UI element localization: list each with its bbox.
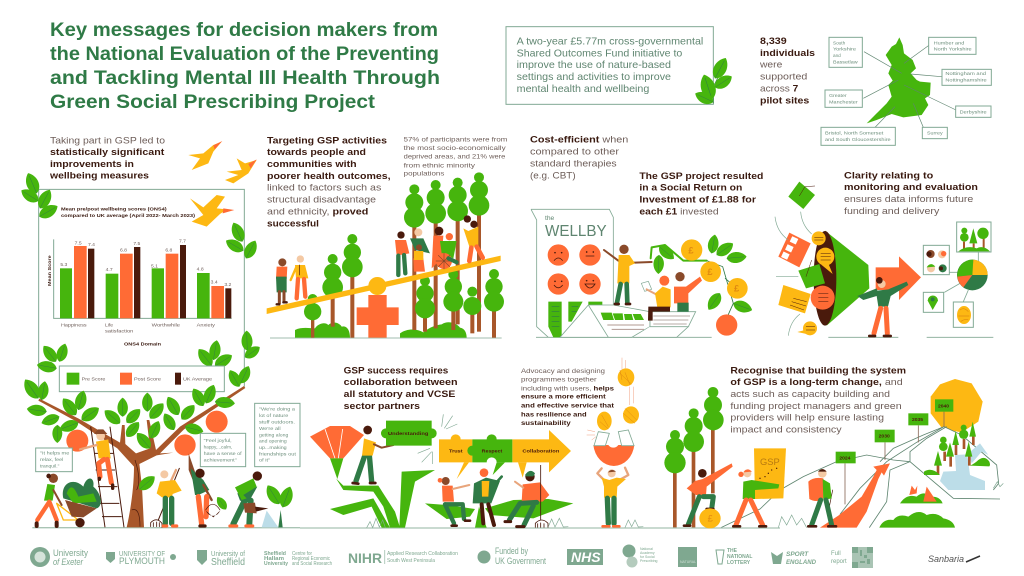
chart title: Mean pre/post wellbeing scores (ONS4) bbox=[61, 207, 167, 213]
logo: Sheffield Hallam University CRESR: University bbox=[264, 561, 288, 567]
logo: National Academy for Social Prescribing: for Social bbox=[640, 555, 655, 559]
map of England with pilot sites: Yorkshire bbox=[833, 47, 856, 52]
logo: The National Lottery bbox=[716, 548, 752, 566]
advocacy text: programmes together bbox=[521, 377, 598, 384]
heading: improvements in bbox=[50, 159, 134, 169]
trees box bbox=[957, 222, 991, 252]
social return text: in a Social Return on bbox=[639, 183, 743, 193]
tall trees bbox=[664, 387, 724, 528]
grass bbox=[367, 518, 643, 528]
advocacy text: has resilience and bbox=[521, 411, 587, 418]
panel: monitoring and evaluation bbox=[775, 170, 993, 337]
advocacy text: sustainability bbox=[521, 420, 571, 427]
logo: The National Lottery: LOTTERY bbox=[727, 560, 751, 566]
grass bbox=[778, 482, 1003, 528]
bar chart: Worthwhile bbox=[152, 323, 180, 329]
bar chart: 4.7 bbox=[106, 267, 113, 273]
puzzle arrow bbox=[439, 430, 571, 479]
person with arms out bbox=[857, 277, 908, 336]
waterfall bbox=[940, 443, 988, 490]
puzzle: understanding bbox=[381, 421, 437, 446]
quote: nature: "We're doing a bbox=[259, 407, 295, 413]
individuals supported text: individuals bbox=[760, 48, 815, 58]
logo: Funded by UK Government: Funded by bbox=[495, 546, 528, 556]
map of England with pilot sites: Nottingham and bbox=[945, 71, 987, 76]
quote: joyful: have a sense of bbox=[204, 451, 242, 457]
full report QR bbox=[831, 547, 873, 568]
person watering plant bbox=[230, 471, 296, 527]
bar chart: 5.3 bbox=[60, 262, 67, 268]
map of England with pilot sites: Surrey bbox=[927, 130, 943, 135]
quote: nature: friendships out bbox=[259, 451, 297, 457]
logo: University of Plymouth: PLYMOUTH bbox=[119, 556, 165, 567]
title: Key messages for decision makers from bbox=[50, 19, 438, 41]
puzzle arrow: Trust bbox=[449, 448, 463, 454]
tree foliage bbox=[20, 364, 253, 494]
title bbox=[50, 19, 440, 113]
hiker bbox=[808, 469, 836, 526]
small trees and bushes bbox=[924, 422, 990, 475]
heading text: towards people and bbox=[267, 147, 366, 157]
quote: joyful: happy,...calm, bbox=[204, 445, 232, 451]
heading text: communities with bbox=[267, 159, 357, 169]
logo: Funded by UK Government bbox=[478, 546, 546, 566]
chart legend bbox=[59, 366, 224, 392]
collaboration heading: collaboration between bbox=[344, 377, 458, 387]
sun bbox=[931, 379, 983, 432]
heading text: poorer health outcomes, bbox=[267, 171, 391, 181]
heading text: and ethnicity, proved bbox=[267, 206, 369, 216]
year signposts: 2024 bbox=[839, 455, 851, 461]
people on see-saw bbox=[276, 215, 483, 304]
bar chart: 3.4 bbox=[211, 280, 218, 286]
falling coins bbox=[587, 358, 639, 440]
map of England with pilot sites: Bassetlaw bbox=[833, 59, 858, 64]
logo: National Academy for Social Prescribing: Prescribing bbox=[640, 559, 658, 563]
cost-efficient text: Cost-efficient when bbox=[530, 135, 628, 145]
data diagram bbox=[923, 222, 991, 327]
cost-efficient text: compared to other bbox=[530, 147, 619, 157]
quote: joyful: achievement" bbox=[204, 458, 237, 464]
title: and Tackling Mental Ill Health Through bbox=[50, 67, 440, 89]
individuals supported text: across 7 bbox=[760, 84, 798, 94]
panel: collaboration and advocacy bbox=[300, 358, 660, 528]
summary box: improve the use of nature-based bbox=[517, 60, 671, 71]
puzzle arrow: Respect bbox=[482, 448, 503, 454]
footer logos bbox=[30, 544, 980, 568]
bar chart: 5.1 bbox=[151, 263, 158, 269]
logo: Sport England: SPORT bbox=[786, 551, 809, 558]
leaves around chart bbox=[18, 171, 263, 374]
full report QR: report bbox=[831, 559, 847, 565]
logo: University of Exeter: University bbox=[53, 548, 88, 559]
statistics text: from ethnic minority bbox=[404, 162, 476, 169]
map of England with pilot sites: Nottinghamshire bbox=[945, 77, 987, 82]
smiley faces bbox=[548, 244, 601, 295]
logo: University of Exeter: of Exeter bbox=[53, 557, 84, 568]
logo: National Academy for Social Prescribing: Academy bbox=[640, 551, 655, 555]
bar chart: 6.8 bbox=[120, 247, 127, 253]
summary box: settings and activities to improve bbox=[517, 72, 671, 83]
chart title: compared to UK average (April 2022- March 2023) bbox=[61, 213, 195, 219]
tree bbox=[20, 364, 253, 527]
logo: Funded by UK Government: UK Government bbox=[495, 556, 546, 566]
social return text bbox=[639, 171, 764, 217]
logo: University of Sheffield: Sheffield bbox=[211, 557, 245, 568]
logo: Natural England: NATURAL bbox=[680, 560, 696, 564]
apples bbox=[66, 411, 228, 456]
advocacy text: Advocacy and designing bbox=[521, 368, 605, 375]
bar chart: 7.5 bbox=[133, 241, 140, 247]
logo: NIHR: NIHR bbox=[348, 550, 382, 566]
heading: Clarity relating to bbox=[844, 170, 934, 180]
heading: of GSP is a long-term change, and bbox=[730, 377, 903, 387]
person with map bbox=[733, 448, 786, 526]
coins and apple bbox=[681, 239, 748, 336]
title: Green Social Prescribing Project bbox=[50, 91, 376, 113]
map of England with pilot sites: Bristol, North Somerset bbox=[825, 130, 884, 135]
ground line bbox=[300, 526, 660, 530]
bar chart: Happiness bbox=[61, 323, 87, 329]
WELLBY document: WELLBY bbox=[545, 223, 607, 240]
year signposts: 2030 bbox=[879, 434, 890, 440]
heading: impact and consistency bbox=[730, 425, 842, 435]
statistics text: deprived areas, and 21% were bbox=[404, 154, 506, 161]
bar chart: 3.2 bbox=[224, 282, 231, 288]
map of England with pilot sites: South bbox=[833, 40, 846, 45]
seated people bbox=[438, 465, 549, 528]
chart title bbox=[61, 207, 195, 219]
social return text: Investment of £1.88 for bbox=[639, 195, 756, 205]
chart frame bbox=[39, 189, 244, 393]
quote: relax: relax, feel bbox=[40, 457, 63, 463]
puzzle arrow: Collaboration bbox=[522, 448, 559, 454]
individuals supported text: were bbox=[759, 60, 782, 70]
person with rake bbox=[151, 468, 182, 527]
floating documents bbox=[775, 182, 825, 336]
quote: relax: tranquil." bbox=[40, 463, 60, 469]
person on ladder bbox=[80, 427, 124, 527]
bar chart: Anxiety bbox=[197, 323, 216, 329]
logo: Sheffield Hallam University CRESR: Centre for bbox=[292, 551, 312, 557]
logo: National Academy for Social Prescribing: National bbox=[640, 547, 653, 551]
advocacy text: and effective service that bbox=[521, 403, 615, 410]
collaboration heading: sector partners bbox=[344, 401, 420, 411]
year signposts: 2035 bbox=[912, 417, 923, 423]
panel: project summary and pilot sites bbox=[506, 27, 991, 145]
quote: nature: of it" bbox=[259, 458, 270, 464]
advocacy text: including with users, helps bbox=[521, 385, 614, 392]
logo: The National Lottery: NATIONAL bbox=[727, 554, 752, 560]
see-saw with cross bbox=[267, 256, 501, 338]
individuals supported text bbox=[759, 36, 815, 106]
bar chart: Mean Score bbox=[47, 255, 53, 286]
cost-efficient text bbox=[530, 135, 628, 181]
signature bbox=[928, 554, 980, 564]
orange path arrow bbox=[820, 463, 890, 528]
arrow bbox=[876, 256, 921, 300]
advocacy text: ensure a more efficient bbox=[521, 394, 607, 401]
quote: relax: "It helps me bbox=[40, 450, 70, 456]
statistics text: the most socio-economically bbox=[404, 145, 506, 152]
social return text: The GSP project resulted bbox=[639, 171, 764, 181]
bar chart: 7.5 bbox=[75, 240, 82, 246]
heading: wellbeing measures bbox=[49, 171, 149, 181]
bar chart: Life bbox=[105, 323, 113, 329]
individuals supported text: pilot sites bbox=[760, 96, 809, 106]
heading: funding project managers and green bbox=[730, 401, 902, 411]
logo: Natural England bbox=[678, 547, 697, 567]
people box bbox=[923, 245, 949, 275]
year signposts bbox=[836, 399, 953, 504]
logo: University of Exeter bbox=[30, 547, 88, 568]
person with wheelbarrow bbox=[37, 474, 101, 527]
heading: providers will help ensure lasting bbox=[730, 413, 884, 423]
quote: joyful bbox=[200, 433, 246, 467]
heading text: structural disadvantage bbox=[267, 195, 376, 205]
bar chart: ONS4 Domain bbox=[124, 341, 161, 347]
summary box: A two-year £5.77m cross-governmental bbox=[517, 37, 703, 48]
map of England with pilot sites: Greater bbox=[829, 93, 847, 98]
quote: nature: stuff outdoors. bbox=[259, 420, 295, 426]
person presenting bbox=[604, 245, 652, 304]
social return text: each £1 invested bbox=[639, 207, 719, 217]
heading: statistically significant bbox=[50, 147, 164, 157]
trees bbox=[304, 172, 504, 338]
quote: nature: and opening bbox=[259, 439, 287, 445]
quote: relax bbox=[36, 448, 72, 472]
summary box: Shared Outcomes Fund initiative to bbox=[517, 48, 683, 59]
heading text bbox=[267, 135, 391, 228]
summary box bbox=[506, 27, 735, 107]
quote: nature bbox=[255, 403, 300, 467]
map of England with pilot sites: and bbox=[833, 53, 841, 58]
statistics text: populations bbox=[404, 171, 445, 178]
statistics text: 57% of participants were from bbox=[404, 136, 508, 143]
icon: birds bbox=[188, 141, 257, 227]
heading: Recognise that building the system bbox=[730, 365, 906, 375]
pie chart bbox=[957, 260, 988, 290]
cost-efficient text: standard therapies bbox=[530, 159, 617, 169]
heading: Taking part in GSP led to bbox=[50, 135, 165, 145]
chart legend: UK Average bbox=[183, 376, 212, 382]
heading bbox=[49, 135, 165, 181]
advocacy text bbox=[521, 368, 615, 427]
logo: The National Lottery: THE bbox=[727, 548, 738, 554]
bar chart: 7.4 bbox=[88, 242, 95, 248]
logo: University of Plymouth bbox=[106, 551, 176, 567]
person pointing on coin bbox=[684, 463, 733, 528]
collaboration heading: GSP success requires bbox=[344, 365, 448, 375]
title: the National Evaluation of the Preventing bbox=[50, 43, 439, 65]
puzzle: understanding: Understanding bbox=[388, 431, 428, 437]
quote: nature: lot of nature bbox=[259, 413, 289, 419]
ground bbox=[828, 336, 993, 339]
coins and apple: £ bbox=[734, 284, 740, 294]
collaboration heading: all statutory and VCSE bbox=[344, 389, 455, 399]
logo: Sheffield Hallam University CRESR: and Social Research bbox=[292, 561, 332, 567]
seating leaves bbox=[425, 499, 573, 528]
map of England with pilot sites: Manchester bbox=[829, 100, 858, 105]
map of England with pilot sites: Humber and bbox=[934, 40, 965, 45]
ground line bbox=[32, 526, 300, 530]
person picking apple bbox=[189, 453, 229, 526]
foreground bush bbox=[879, 512, 955, 528]
logo: University of Plymouth: UNIVERSITY OF bbox=[119, 551, 165, 558]
ground and bushes bbox=[270, 322, 502, 338]
logo: Sheffield Hallam University CRESR: Regional Economic bbox=[292, 556, 330, 562]
heading text: Targeting GSP activities bbox=[267, 135, 387, 145]
bar chart bbox=[47, 238, 232, 347]
logo: University of Sheffield: University of bbox=[211, 549, 246, 558]
collaboration heading bbox=[344, 365, 458, 411]
brain box bbox=[953, 302, 973, 327]
seated people bbox=[641, 272, 702, 321]
bar chart: satisfaction bbox=[105, 329, 134, 335]
bar chart: 6.8 bbox=[165, 247, 172, 253]
person holding puzzle piece bbox=[353, 426, 393, 484]
panel: wellbeing improvements chart bbox=[18, 135, 263, 393]
bar chart: 7.7 bbox=[179, 238, 186, 244]
logo: National Academy for Social Prescribing bbox=[622, 544, 658, 568]
bar chart: 4.8 bbox=[197, 266, 204, 272]
panel: targeting GSP see-saw bbox=[267, 135, 508, 338]
signature: Sanbaria bbox=[928, 554, 964, 564]
WELLBY document bbox=[531, 209, 712, 337]
logo: Sport England bbox=[771, 551, 816, 566]
person pointing on coin: £ bbox=[708, 514, 714, 524]
WELLBY document: the bbox=[545, 215, 555, 222]
logo: Sheffield Hallam University CRESR bbox=[264, 551, 332, 567]
full report QR: Full bbox=[831, 551, 841, 557]
ground line bbox=[660, 526, 780, 530]
quote: nature: up...making bbox=[259, 445, 287, 451]
map of England with pilot sites: North Yorkshire bbox=[934, 47, 972, 52]
money tree branch bbox=[651, 234, 754, 336]
logo: Sport England: ENGLAND bbox=[786, 559, 816, 566]
panel: apple tree and quotes bbox=[20, 364, 300, 528]
logo: NIHR bbox=[348, 550, 458, 566]
heading bbox=[844, 170, 978, 216]
map of England with pilot sites bbox=[821, 37, 991, 145]
mountains bbox=[721, 427, 1000, 528]
chart legend: Pre Score bbox=[82, 376, 106, 382]
location pin box bbox=[923, 292, 944, 312]
statistics text bbox=[404, 136, 508, 178]
logo: NIHR: South West Peninsula bbox=[387, 558, 436, 564]
rabbits and bush bbox=[900, 486, 943, 503]
speech bubbles bbox=[797, 231, 835, 335]
flower plant bbox=[310, 426, 435, 528]
quote: nature: getting along bbox=[259, 432, 289, 438]
summary box: mental health and wellbeing bbox=[517, 84, 650, 95]
megaphone bbox=[775, 182, 869, 336]
panel: long-term change bbox=[660, 365, 1003, 528]
map of England with pilot sites: and South Gloucestershire bbox=[825, 137, 891, 142]
coins and apple: £ bbox=[688, 245, 694, 255]
chart legend: Post Score bbox=[134, 376, 161, 382]
logo: University of Sheffield bbox=[197, 549, 246, 568]
magnet and person bbox=[593, 430, 634, 526]
quote: joyful: "Feel joyful, bbox=[204, 438, 232, 444]
logo: NIHR: Applied Research Collaboration bbox=[387, 551, 458, 557]
year signposts: 2040 bbox=[938, 403, 949, 409]
heading bbox=[730, 365, 906, 435]
individuals supported text: 8,339 bbox=[760, 36, 787, 46]
coins and apple: £ bbox=[707, 267, 713, 277]
panel: cost-efficient and social return bbox=[530, 135, 764, 337]
heading: acts such as capacity building and bbox=[730, 389, 890, 399]
quote: nature: We're all bbox=[259, 426, 281, 432]
heading: monitoring and evaluation bbox=[844, 182, 978, 192]
heading text: linked to factors such as bbox=[267, 183, 382, 193]
individuals supported text: supported bbox=[760, 72, 807, 82]
logo: NHS: NHS bbox=[571, 549, 601, 565]
person with map: GSP bbox=[760, 457, 780, 467]
map of England with pilot sites: Derbyshire bbox=[960, 109, 987, 114]
logo: Sheffield Hallam University CRESR: Sheffield bbox=[264, 551, 286, 557]
heading: funding and delivery bbox=[844, 206, 940, 216]
logo: Sheffield Hallam University CRESR: Hallam bbox=[264, 556, 285, 562]
heading text: successful bbox=[267, 218, 319, 228]
cost-efficient text: (e.g. CBT) bbox=[530, 171, 576, 181]
heading: ensures data informs future bbox=[844, 194, 973, 204]
